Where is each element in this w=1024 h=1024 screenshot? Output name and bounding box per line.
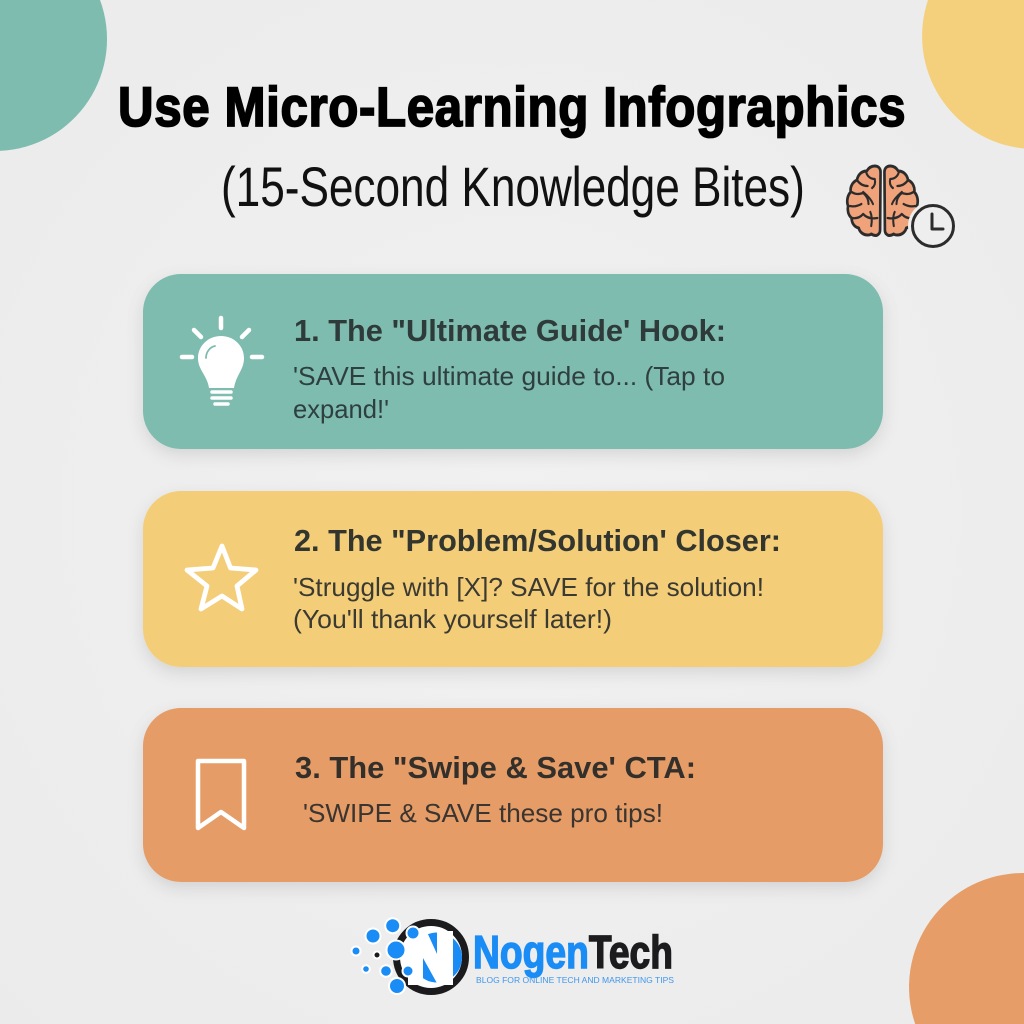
title: Use Micro-Learning Infographics [118,76,906,139]
decorative circle: top right [922,0,1024,148]
icon: light bulb [182,318,262,404]
icon: bookmark [198,761,244,828]
heading: closer: 2. The "Problem/Solution' Closer: [294,524,781,558]
decorative circle: top left [0,0,107,151]
icon: clock [908,201,958,251]
subtitle: (15-Second Knowledge Bites) [221,155,805,218]
icon: brain [847,166,918,235]
icon: brain and clock [847,166,958,251]
text: hook body: expand!' [293,394,389,424]
text: hook body [293,361,725,424]
logo wordmark: NogenTech [473,926,673,978]
panel: problem solution closer [143,491,883,667]
decorative circle: bottom right [909,873,1024,1024]
heading: CTA: 3. The "Swipe & Save' CTA: [295,751,696,785]
text: closer body: (You'll thank yourself later!) [293,604,612,634]
text: closer body: 'Struggle with [X]? SAVE for the solution! [293,572,764,602]
heading: hook: 1. The "Ultimate Guide' Hook: [294,314,726,348]
logo mark [352,918,466,994]
panel: ultimate guide hook [143,274,883,449]
text: closer body [293,572,764,634]
logo: NogenTech [352,918,674,994]
logo tagline: BLOG FOR ONLINE TECH AND MARKETING TIPS [476,975,674,985]
panel: swipe and save CTA [143,708,883,882]
text: hook body: 'SAVE this ultimate guide to... (Tap to [293,361,725,391]
icon: star [187,546,256,609]
text: CTA body: 'SWIPE & SAVE these pro tips! [303,798,663,828]
